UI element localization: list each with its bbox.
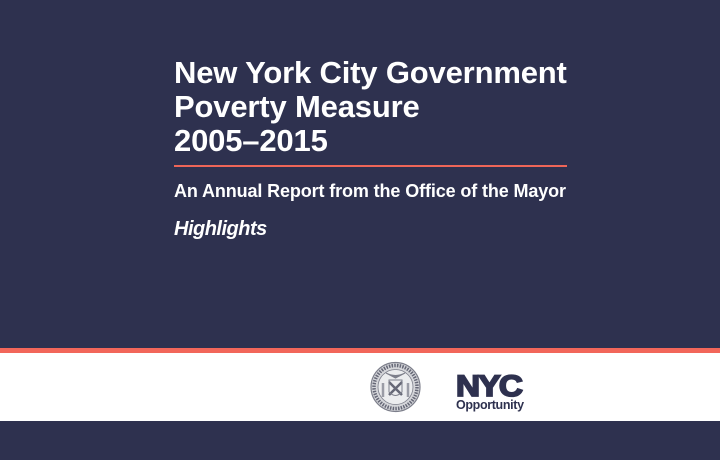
- title: [174, 55, 567, 158]
- logo: NYC Opportunity: [456, 370, 524, 412]
- title: New York City Government: [174, 55, 567, 90]
- coral stripe: [0, 348, 720, 353]
- subtitle: An Annual Report from the Office of the Mayor: [174, 181, 566, 201]
- title: 2005–2015: [174, 123, 328, 158]
- logo wordmark Opportunity: Opportunity: [456, 398, 524, 412]
- title: Poverty Measure: [174, 89, 420, 124]
- highlights label: Highlights: [174, 218, 267, 240]
- divider line: [174, 165, 567, 167]
- footer band: [0, 348, 720, 421]
- icon: city seal: [370, 362, 421, 412]
- logo wordmark NYC: NYC: [456, 370, 521, 403]
